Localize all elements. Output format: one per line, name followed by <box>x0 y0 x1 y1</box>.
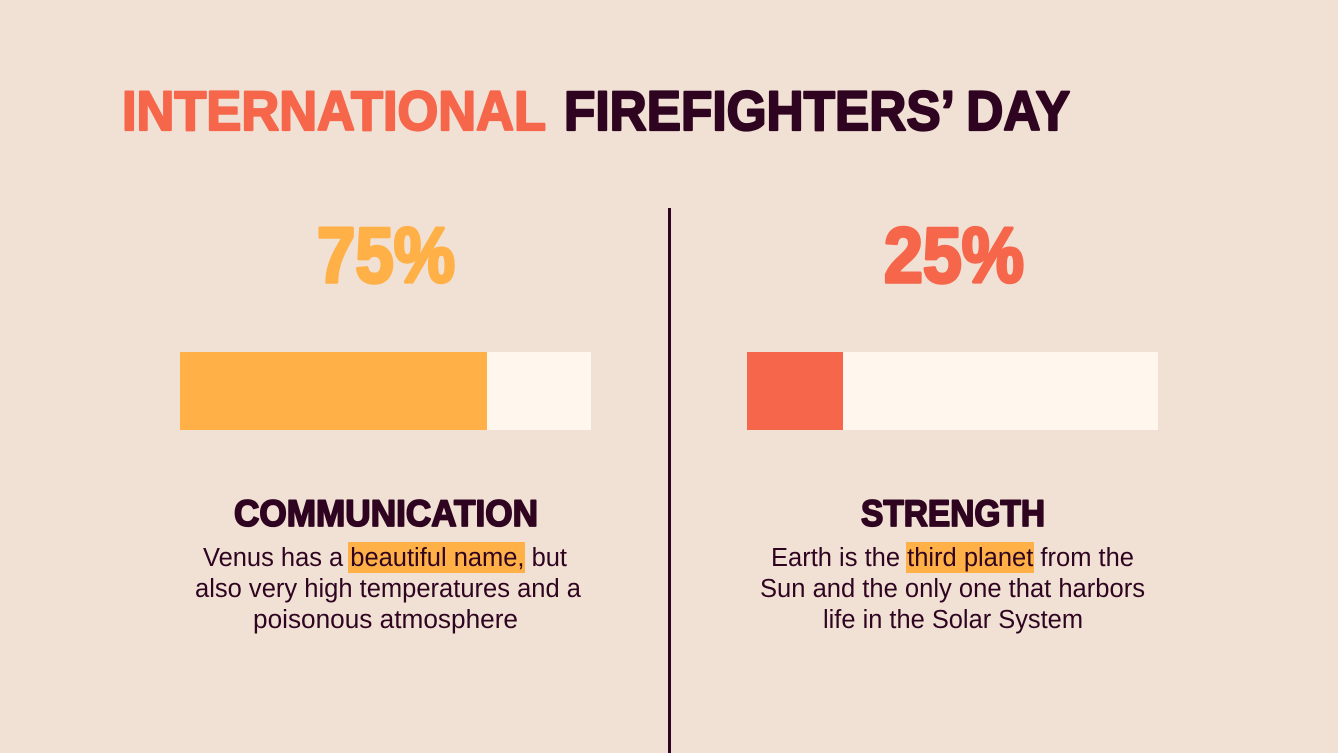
title: INTERNATIONAL <box>122 79 546 142</box>
text block: earth description: life in the Solar System <box>823 606 1083 634</box>
progress bar: 25% <box>747 352 1158 430</box>
text block: earth description: Sun and the only one that harbors <box>760 575 1145 603</box>
heading: strength: STRENGTH <box>861 493 1045 534</box>
text block: venus description: Venus has a beautiful name, but <box>203 544 567 572</box>
text block: venus description <box>195 542 582 634</box>
panel: communication <box>180 211 591 634</box>
text block: earth description <box>760 542 1145 634</box>
progress bar: 75% <box>180 352 591 430</box>
text block: venus description: poisonous atmosphere <box>253 606 518 634</box>
title: FIREFIGHTERS’ DAY <box>564 79 1070 142</box>
title <box>122 79 1070 142</box>
panel: strength <box>747 211 1158 634</box>
percentage: 75%: 75% <box>317 211 455 299</box>
text block: earth description: Earth is the third planet from the <box>771 544 1134 572</box>
text block: venus description: also very high temperatures and a <box>195 575 582 603</box>
heading: communication: COMMUNICATION <box>234 493 538 534</box>
percentage: 25%: 25% <box>884 211 1024 299</box>
